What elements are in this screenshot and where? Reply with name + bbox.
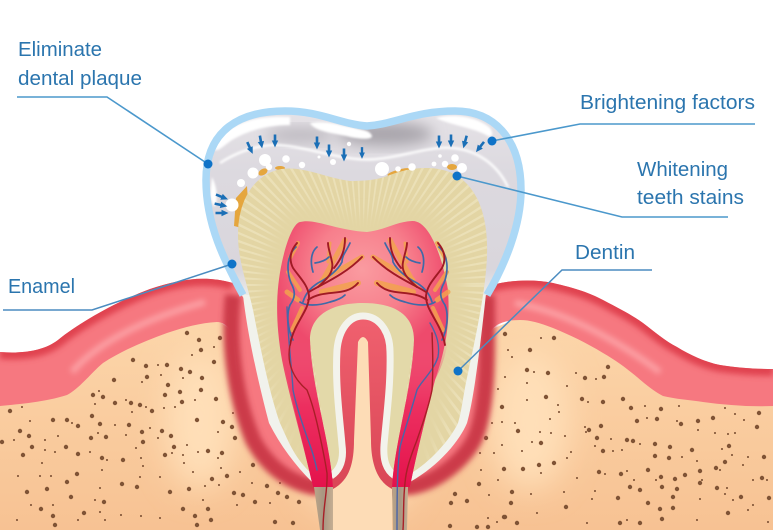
enamel crown bbox=[210, 114, 518, 295]
callout: enamel: Enamel bbox=[8, 276, 75, 298]
callout: eliminate dental plaque bbox=[17, 39, 212, 168]
callout: brightening factors bbox=[488, 92, 755, 146]
tooth bbox=[200, 105, 530, 530]
enamel blue outline bbox=[206, 111, 521, 295]
callout: eliminate dental plaque: Eliminate bbox=[18, 39, 102, 61]
gums bbox=[0, 279, 773, 487]
bone pores large bbox=[2, 333, 769, 527]
pulp bbox=[277, 221, 449, 487]
blue arrows bbox=[214, 134, 487, 216]
dentin bbox=[238, 168, 487, 474]
bone pores small bbox=[14, 338, 768, 523]
root canals bbox=[314, 487, 333, 530]
callout: whitening teeth stains: Whitening bbox=[637, 159, 728, 181]
callout: enamel bbox=[3, 260, 236, 310]
callout: whitening teeth stains bbox=[452, 159, 744, 217]
callout: whitening teeth stains: teeth stains bbox=[637, 187, 744, 209]
jawbone bbox=[0, 317, 773, 530]
callout: eliminate dental plaque: dental plaque bbox=[18, 68, 142, 90]
inner dentin arch bbox=[310, 303, 414, 480]
callout: dentin: Dentin bbox=[575, 242, 635, 264]
white bubbles bbox=[226, 142, 467, 212]
central bone bbox=[333, 337, 392, 530]
stains bbox=[234, 164, 457, 228]
nerves and vessels bbox=[287, 238, 448, 530]
tooth white body bbox=[242, 285, 487, 482]
central gum notch bbox=[331, 316, 395, 490]
callout: brightening factors: Brightening factors bbox=[580, 92, 755, 114]
callout: dentin bbox=[454, 242, 652, 376]
